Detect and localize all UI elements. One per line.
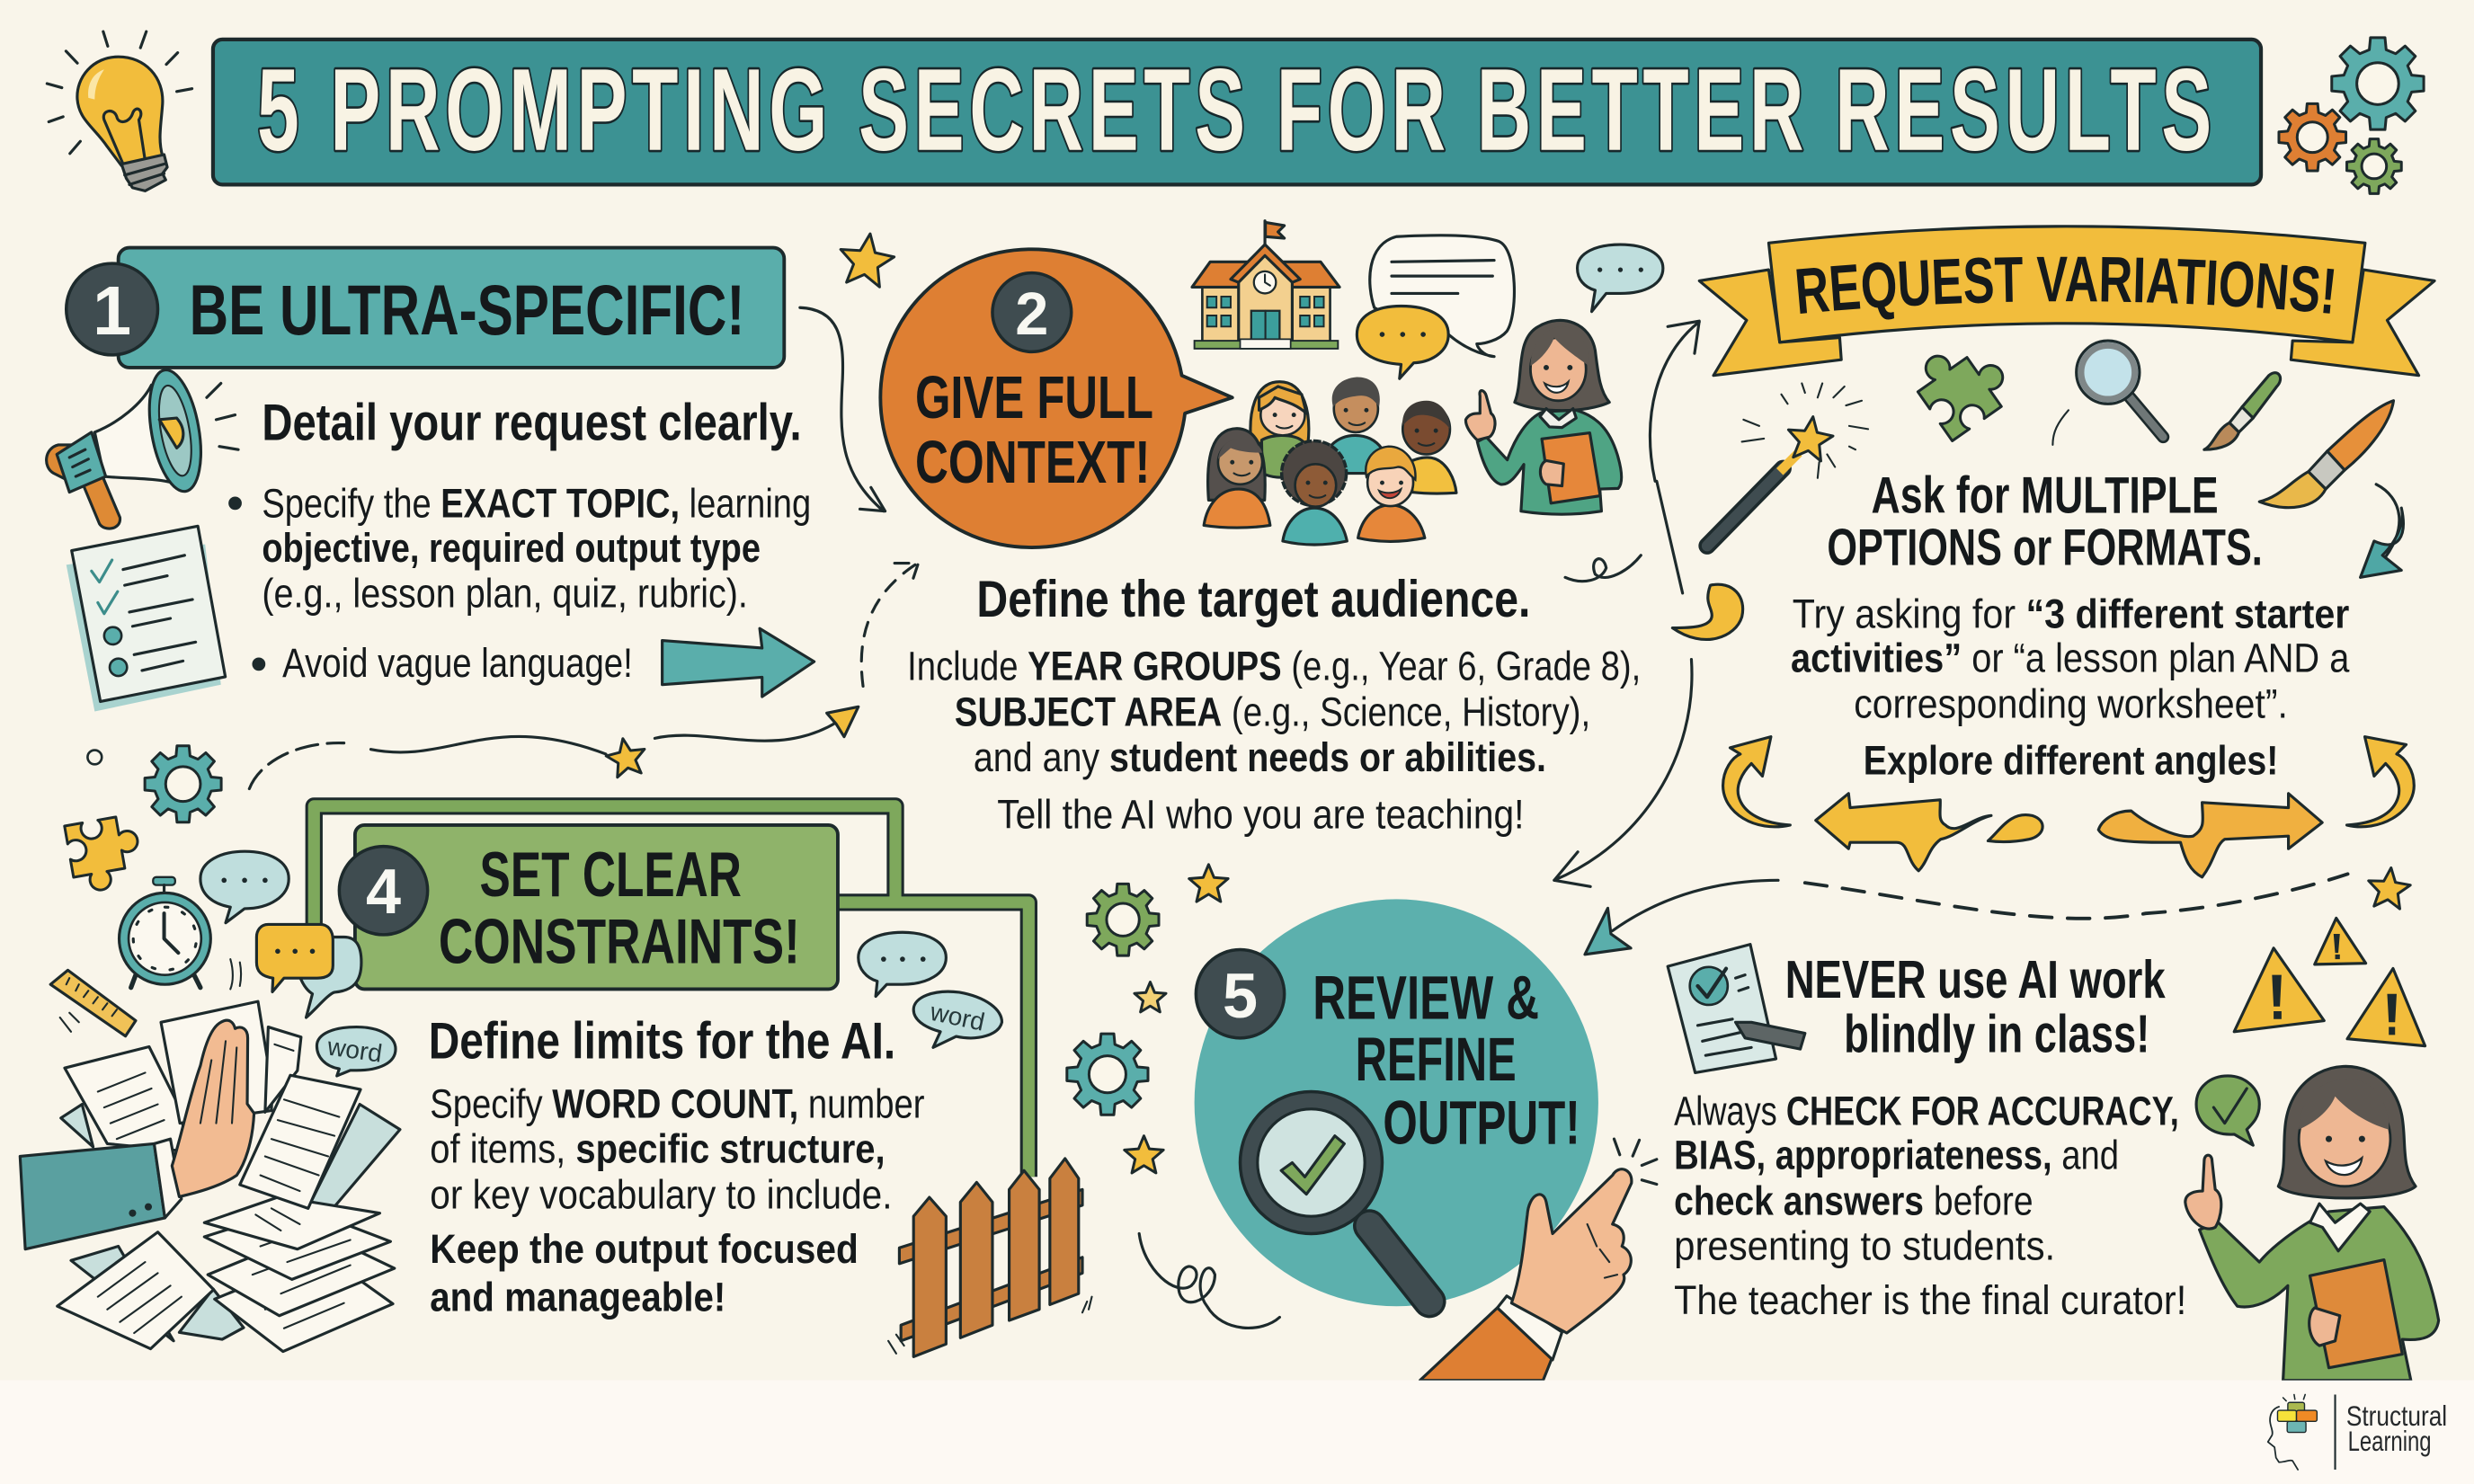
icon: magnifier: [2052, 341, 2163, 445]
icon: star: [603, 735, 648, 778]
illustration: teacher with book: [2185, 1066, 2439, 1381]
icon: green gear: [1087, 884, 1159, 955]
icon: star: [1125, 1136, 1163, 1173]
icon: yellow puzzle: [65, 814, 145, 894]
panel: step 4 set clear constraints: [20, 806, 1092, 1356]
step 2 speech bubble heading: CONTEXT!: [915, 430, 1150, 496]
arrow: step 3 to step 2 curve: [1554, 660, 1692, 886]
step 2 speech bubble heading: [880, 249, 1233, 547]
body text: review: The teacher is the final curator!: [1674, 1277, 2186, 1323]
ribbon heading: REQUEST VARIATIONS!: [1796, 257, 2334, 320]
student: yellow shirt boy: [1402, 401, 1456, 493]
arrow: yellow curved right: [2347, 737, 2414, 827]
footer band: [0, 1381, 2474, 1484]
curly flourish: [1139, 1233, 1279, 1328]
arrow: dashed upward: [861, 564, 918, 686]
body text: limits: Specify WORD COUNT, number: [430, 1080, 924, 1126]
logo: structural learning: Structural: [2346, 1400, 2447, 1432]
icon: document with check: [1668, 945, 1805, 1072]
icon: speech bubbles: [1357, 235, 1663, 378]
illustration: papers pile: [58, 1001, 400, 1352]
icon: big paintbrush: [2259, 401, 2393, 508]
illustration: pointing hand: [1420, 1139, 1657, 1381]
motion marks: [230, 959, 241, 989]
icon: star: [1189, 865, 1228, 902]
body text: audience: and any student needs or abilities.: [974, 734, 1546, 780]
icon: school: [1192, 221, 1339, 349]
icon: checklist: [67, 526, 226, 712]
arrow: step 1 to step 2: [800, 307, 885, 511]
body text: review: [1674, 1088, 2186, 1323]
icon: word bubble: word: [325, 1032, 384, 1068]
body text: limits: and manageable!: [430, 1274, 725, 1320]
panel: step 5 review and refine: [1195, 899, 2439, 1381]
title banner: [213, 40, 2261, 184]
student: teal shirt boy: [1331, 377, 1382, 474]
icon: speech bubble: [859, 932, 946, 997]
step 5 circle heading: [1195, 899, 1598, 1306]
body text: limits: or key vocabulary to include.: [430, 1171, 893, 1217]
student: curly-haired boy: [1282, 441, 1347, 545]
step 4 heading box: SET CLEAR: [480, 839, 742, 910]
icon: small circle: [87, 751, 102, 764]
icon: gears: [2279, 38, 2424, 193]
step 5 circle heading: OUTPUT!: [1383, 1088, 1580, 1157]
logo: structural learning: [2268, 1394, 2447, 1470]
step 4 heading box: CONSTRAINTS!: [439, 905, 800, 976]
icon: word bubble: [913, 991, 1001, 1047]
body text: limits: Keep the output focused: [430, 1226, 859, 1272]
heading: never use AI blindly: blindly in class!: [1844, 1004, 2149, 1064]
bullet list: [228, 481, 811, 686]
step 4 heading box: 4: [366, 856, 401, 927]
icon: magic wand: [1707, 383, 1868, 546]
icon: word bubble: word: [927, 998, 987, 1036]
body text: variations: activities” or “a lesson plan AND a: [1791, 635, 2350, 681]
step 5 circle heading: REVIEW &: [1313, 963, 1539, 1032]
student: dark-haired girl: [1204, 429, 1270, 528]
icon: star: [1135, 982, 1166, 1012]
step 2 speech bubble heading: GIVE FULL: [915, 365, 1153, 431]
icon: puzzle piece: [1907, 330, 2017, 440]
arrow: to request variations: [1650, 321, 1699, 481]
arrow: wavy to step 2: [249, 706, 859, 789]
panel: step 3 request variations: [1697, 225, 2436, 879]
step 2 speech bubble heading: 2: [1015, 281, 1048, 348]
icon: teal gear: [145, 746, 221, 822]
student: blonde girl: [1250, 382, 1309, 477]
heading: multiple options: [1827, 467, 2263, 576]
icon: small paintbrush: [2204, 373, 2281, 449]
body text: limits: [430, 1080, 924, 1320]
body text: audience: SUBJECT AREA (e.g., Science, History),: [955, 689, 1590, 734]
body text: audience: Include YEAR GROUPS (e.g., Year 6, Grade 8),: [907, 643, 1641, 689]
body text: review: Always CHECK FOR ACCURACY,: [1674, 1088, 2179, 1133]
connector line: [1657, 481, 1683, 593]
illustration: stop hand: [20, 1020, 254, 1249]
icon: check bubble: [2196, 1076, 2259, 1145]
arrow: yellow wavy left: [1816, 794, 2042, 871]
heading: detail your request: Detail your request clearly.: [262, 395, 802, 452]
ribbon heading: [1697, 225, 2436, 378]
panel: step 2 give full context: [880, 221, 1663, 837]
student: ginger boy: [1358, 447, 1425, 541]
logo: structural learning: Learning: [2348, 1425, 2432, 1457]
bullet list: objective, required output type: [262, 525, 761, 571]
bullet list: Specify the EXACT TOPIC, learning: [262, 481, 811, 527]
green frame: [314, 806, 1028, 1177]
arrow: teal right: [663, 628, 814, 697]
body text: limits: of items, specific structure,: [430, 1125, 885, 1171]
body text: review: BIAS, appropriateness, and: [1674, 1133, 2119, 1178]
curly flourish: [1565, 555, 1641, 582]
arrow: dashed to step 5: [1585, 874, 2348, 955]
step 5 circle heading: 5: [1223, 960, 1258, 1031]
illustration: fence: [888, 1159, 1092, 1356]
icon: star: [836, 230, 897, 289]
bullet list: (e.g., lesson plan, quiz, rubric).: [262, 571, 748, 617]
arrow: yellow curved left: [1723, 737, 1790, 827]
illustration: teacher pointing: [1465, 320, 1622, 514]
body text: variations: Try asking for “3 different starter: [1793, 591, 2350, 637]
heading: define limits: Define limits for the AI.: [429, 1013, 895, 1071]
illustration: students: [1204, 377, 1456, 545]
icon: magnifier with check: [1241, 1092, 1429, 1302]
step 5 circle heading: REFINE: [1356, 1025, 1517, 1094]
bullet list: Avoid vague language!: [282, 640, 633, 686]
heading: never use AI blindly: [1785, 949, 2166, 1064]
body text: variations: [1791, 591, 2350, 784]
arrow: teal curved: [2361, 484, 2403, 577]
body text: audience: Tell the AI who you are teaching!: [997, 791, 1524, 837]
step 1 heading banner: BE ULTRA-SPECIFIC!: [190, 271, 744, 350]
arrow: yellow wavy right: [2098, 794, 2322, 877]
icon: ruler: [50, 970, 136, 1036]
icon: speech bubbles: [200, 851, 361, 1017]
step 1 heading banner: 1: [93, 272, 131, 350]
step 4 heading box: [339, 825, 838, 989]
icon: alarm clock: [120, 877, 210, 988]
icon: word bubble: [316, 1027, 396, 1076]
body text: variations: Explore different angles!: [1864, 738, 2278, 784]
body text: review: presenting to students.: [1674, 1222, 2055, 1268]
heading: multiple options: Ask for MULTIPLE: [1872, 467, 2219, 524]
body text: variations: corresponding worksheet”.: [1854, 681, 2288, 727]
heading: multiple options: OPTIONS or FORMATS.: [1827, 519, 2263, 576]
heading: define audience: Define the target audience.: [976, 571, 1530, 628]
heading: never use AI blindly: NEVER use AI work: [1785, 949, 2166, 1009]
icon: light bulb: [47, 31, 192, 191]
icon: star: [2366, 866, 2412, 910]
body text: audience: [907, 643, 1641, 837]
icon: megaphone: [47, 366, 238, 529]
icon: teal gear: [1067, 1034, 1148, 1115]
icon: yellow blob: [1672, 584, 1743, 639]
panel: step 1 be ultra-specific: [47, 248, 814, 712]
body text: review: check answers before: [1674, 1177, 2033, 1223]
icon: warning triangles: [2234, 918, 2425, 1046]
step 1 heading banner: [67, 248, 784, 368]
